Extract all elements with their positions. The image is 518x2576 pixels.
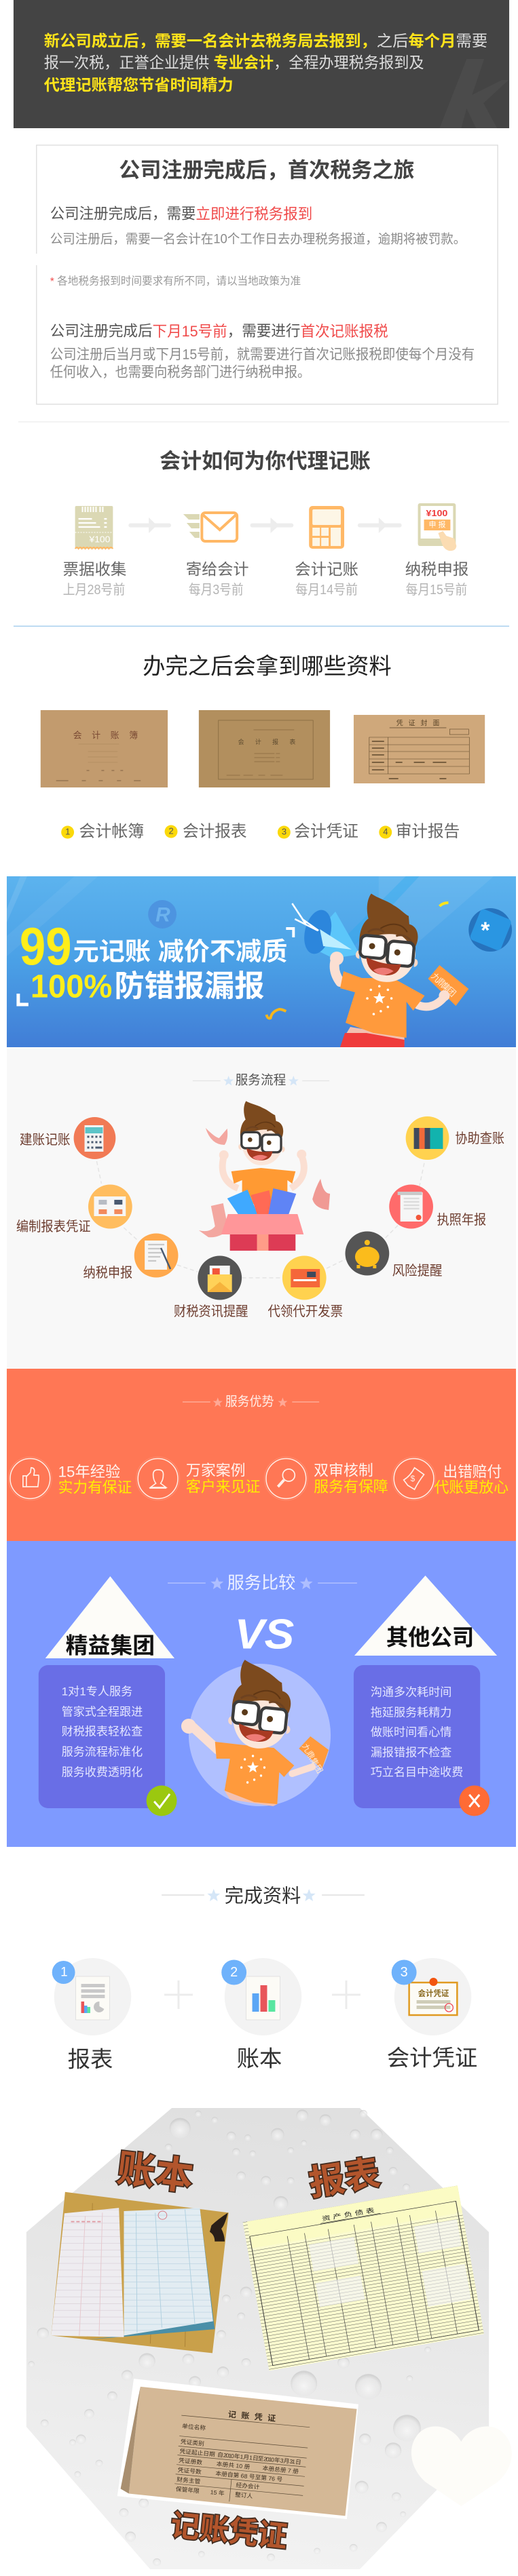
advantage: compensation <box>392 1457 508 1500</box>
service: setup bookkeeping <box>20 1117 115 1159</box>
badge 3: 3 <box>401 1965 408 1980</box>
headline: 100% error proof <box>31 969 264 1005</box>
panel: document photos on water-drop octagon <box>26 2108 512 2569</box>
advantage: double audit: 服务有保障 <box>314 1478 388 1496</box>
advantage: ten thousand cases <box>136 1457 261 1500</box>
icon: receipt: ¥100 <box>88 534 110 545</box>
illustration: megaphone mascot <box>292 893 468 1047</box>
advantage: compensation: 代账更放心 <box>434 1479 508 1496</box>
text: filing detail: 公司注册后当月或下月15号前，就需要进行首次记账报税即使每个月没有 <box>50 347 475 363</box>
panel: completed materials <box>52 1885 477 2072</box>
advantage: ten thousand cases: 万家案例 <box>186 1462 246 1479</box>
illustration: megaphone mascot: 九鼎集团 <box>429 971 458 999</box>
icon: tablet filing: ¥100 <box>426 509 447 518</box>
illustration: mascot in circle <box>181 1659 331 1806</box>
heading: comparison <box>168 1574 357 1593</box>
label 4: 审计报告 <box>396 822 460 841</box>
triangle: Jingyi Group <box>45 1576 174 1658</box>
item: accounting voucher: 会计凭证 <box>418 1988 449 1998</box>
text: first filing: 公司注册完成后下月15号前，需要进行首次记账报税 <box>50 322 388 340</box>
advantage: 15 years experience: 15年经验 <box>58 1463 120 1481</box>
step dates: 每月14号前 <box>295 582 358 598</box>
panel: how accountants do the books <box>63 449 468 598</box>
panel: service process <box>7 1048 516 1369</box>
photo: voucher envelope: 保管年限 <box>175 2485 200 2495</box>
photo: open ledger <box>51 2192 229 2353</box>
panel: service advantages <box>7 1369 516 1541</box>
headline: 99 yuan bookkeeping <box>20 918 287 976</box>
photo: account book cover: 会计账簿 <box>73 730 138 741</box>
service: audit assistance: 协助查账 <box>455 1131 504 1146</box>
list: other companies: 沟通多次耗时间 <box>371 1685 451 1699</box>
badge 1: 1 <box>60 1965 68 1980</box>
photo: voucher envelope: 本册总册 7 册 <box>262 2464 299 2475</box>
text: registration detail: 公司注册后，需要一名会计在10个工作日去办理税务报道，逾期将被罚款。 <box>50 231 466 247</box>
icon: R badge <box>148 900 177 929</box>
heading: advantages: 服务优势 <box>225 1394 274 1409</box>
label 2: 2 <box>169 825 174 836</box>
icon: calculator <box>309 506 344 549</box>
service: tax filing: 纳税申报 <box>84 1265 132 1281</box>
intro text: 代理记账帮您节省时间精力 <box>44 76 234 94</box>
triangle: other companies <box>354 1576 497 1656</box>
list: Jingyi Group: 管家式全程跟进 <box>62 1705 143 1719</box>
advantage: double audit: 双审核制 <box>314 1462 373 1479</box>
photo: voucher envelope: 凭证号数 <box>177 2466 202 2476</box>
step dates: 每月3号前 <box>189 582 244 598</box>
item: report <box>52 1958 131 2035</box>
service: tax filing <box>84 1233 178 1281</box>
service: license annual report: 执照年报 <box>437 1212 486 1228</box>
service: risk alert: 风险提醒 <box>392 1263 442 1279</box>
photo: voucher envelope: 整订人 <box>235 2491 253 2499</box>
heading: comparison: 服务比较 <box>227 1574 295 1593</box>
illustration: mascot with gift box <box>199 1101 330 1251</box>
photo: voucher cover <box>354 715 485 783</box>
service: audit assistance <box>406 1116 504 1160</box>
list: Jingyi Group <box>39 1665 165 1808</box>
photo: voucher envelope: 自 2010 年 1 月 1 日至 2010 年 3 月 31 日 <box>217 2451 301 2465</box>
note: * 各地税务报到时间要求有所不同，请以当地政策为准 <box>50 275 301 288</box>
photo: account book cover <box>41 710 168 787</box>
VS: VS <box>235 1611 294 1658</box>
icon: notebook badge <box>468 908 513 952</box>
advantage: 15 years experience <box>8 1457 132 1500</box>
label 1: 1 <box>65 826 70 837</box>
step labels: 会计记账 <box>295 560 358 578</box>
advantage: compensation: 出错赔付 <box>443 1463 502 1481</box>
heading: completed materials <box>162 1885 365 1907</box>
photo: voucher envelope: 15 年 <box>210 2488 225 2497</box>
heading: how accounting works: 会计如何为你代理记账 <box>160 449 371 473</box>
plus <box>164 1980 193 2009</box>
photo: voucher envelope: 单位名称 <box>182 2422 206 2432</box>
headline: 100% error proof: 防错报漏报 <box>114 969 264 1003</box>
water droplets <box>28 2109 431 2566</box>
list: Jingyi Group: 服务收费透明化 <box>62 1765 143 1779</box>
badge 2: 2 <box>230 1965 238 1980</box>
photo: voucher envelope <box>117 2379 358 2519</box>
plus <box>332 1980 360 2009</box>
item labels: 报表 <box>68 2046 113 2072</box>
icon: envelope <box>183 513 237 541</box>
arrow 3 <box>358 518 402 533</box>
overlay title: report: 报表 <box>306 2153 383 2203</box>
photo: voucher envelope: 凭证类别 <box>180 2438 204 2447</box>
list: other companies: 巧立名目中途收费 <box>371 1765 463 1779</box>
heading: completed materials: 完成资料 <box>225 1885 301 1907</box>
photo: voucher cover: 凭证封面 <box>396 718 439 728</box>
list: Jingyi Group: 财税报表轻松查 <box>62 1725 143 1738</box>
label 1: 会计帐簿 <box>79 822 144 841</box>
label 2: 会计报表 <box>183 822 247 841</box>
text: immediate registration: 公司注册完成后，需要立即进行税务报到 <box>50 205 312 222</box>
illustration: mascot in circle: 九鼎集团 <box>300 1742 325 1775</box>
headline: 99 yuan bookkeeping: 元记账 减价不减质 <box>73 937 287 966</box>
triangle: Jingyi Group: 精益集团 <box>66 1633 155 1658</box>
photo: report cover: 会计报表 <box>238 738 295 745</box>
arrow 2 <box>251 518 293 533</box>
icon: R badge: R <box>155 903 170 926</box>
service: setup bookkeeping: 建账记账 <box>20 1132 71 1148</box>
list: Jingyi Group: 服务流程标准化 <box>62 1745 143 1759</box>
intro text: 新公司成立后，需要一名会计去税务局去报到， 之后每个月需要 <box>44 32 487 50</box>
photo: voucher envelope: 财务主管 <box>177 2476 201 2485</box>
list: other companies <box>354 1665 480 1808</box>
heading: first tax journey: 公司注册完成后，首次税务之旅 <box>119 158 415 182</box>
list: other companies: 做账时间看心情 <box>371 1725 451 1739</box>
icon: notebook badge: * <box>481 918 490 943</box>
photo: voucher envelope: 本册共 10 册 <box>216 2460 251 2470</box>
arrow 1 <box>128 518 171 533</box>
item labels: 账本 <box>237 2046 282 2071</box>
headline: 99 yuan bookkeeping: 99 <box>20 918 72 976</box>
step labels: 纳税申报 <box>405 560 468 578</box>
advantage: ten thousand cases: 客户来见证 <box>186 1478 261 1496</box>
heading: service process: 服务流程 <box>236 1072 286 1088</box>
service: risk alert <box>346 1232 442 1279</box>
advantage: 15 years experience: 实力有保证 <box>58 1479 132 1496</box>
advantage: compensation: $ <box>411 1474 415 1483</box>
heading: advantages <box>183 1394 319 1409</box>
panel: dark intro banner <box>14 0 509 128</box>
brackets and confetti <box>18 903 448 1018</box>
label 3: 会计凭证 <box>294 822 358 841</box>
service: prepare reports and vouchers <box>16 1184 132 1234</box>
headline: 100% error proof: 100% <box>31 969 112 1005</box>
step labels <box>63 560 468 578</box>
panel: first tax journey <box>35 145 498 404</box>
panel: service comparison <box>7 1541 516 1847</box>
step labels: 票据收集 <box>63 560 126 578</box>
icon: tablet filing: 申报 <box>429 520 445 529</box>
icon: check <box>147 1785 177 1816</box>
panel: promo banner <box>7 876 516 1047</box>
panel: documents received <box>41 653 485 841</box>
service: invoice issuing <box>267 1256 343 1319</box>
item labels <box>68 2045 477 2072</box>
service: license annual report <box>389 1184 486 1229</box>
label 4: 4 <box>383 826 388 837</box>
icon: receipt <box>75 506 113 549</box>
heading: service process <box>193 1072 329 1088</box>
step dates <box>63 582 467 598</box>
label 3: 3 <box>282 826 286 837</box>
document labels <box>61 822 460 841</box>
intro text <box>44 32 487 94</box>
photo: balance sheet: 资 产 负 债 表 <box>321 2206 375 2223</box>
list: other companies: 拖延服务耗精力 <box>371 1706 451 1719</box>
text: filing detail <box>50 347 475 380</box>
overlay title: voucher: 记账凭证 <box>169 2509 289 2554</box>
advantage: double audit <box>264 1457 388 1500</box>
photo: voucher envelope: 本册自第 68 号至第 76 号 <box>215 2470 283 2483</box>
list: other companies: 漏报错报不检查 <box>371 1746 451 1759</box>
photo: voucher envelope: 经办会计 <box>236 2481 260 2491</box>
photo: report cover <box>199 710 330 787</box>
photo: voucher envelope: 凭证起止日期 <box>179 2447 215 2458</box>
step dates: 每月15号前 <box>406 582 467 598</box>
photo: voucher envelope: 凭证册数 <box>179 2456 203 2466</box>
item: accounting voucher <box>392 1958 471 2035</box>
item: ledger <box>221 1958 301 2035</box>
step dates: 上月28号前 <box>63 582 125 598</box>
list: Jingyi Group: 1对1专人服务 <box>62 1685 132 1698</box>
connectors <box>96 1161 425 1278</box>
overlay title: ledger: 账本 <box>115 2147 196 2198</box>
service: prepare reports and vouchers: 编制报表凭证 <box>16 1219 91 1234</box>
icon: cross <box>459 1785 489 1816</box>
triangle: other companies: 其他公司 <box>386 1624 474 1650</box>
service: tax information alerts: 财税资讯提醒 <box>174 1304 248 1319</box>
photo: balance sheet <box>243 2185 484 2370</box>
text: filing detail: 任何收入，也需要向税务部门进行纳税申报。 <box>50 364 310 380</box>
service: tax information alerts <box>174 1256 248 1319</box>
photo: voucher envelope: 记账凭证 <box>227 2409 276 2423</box>
icon: tablet filing <box>418 503 456 551</box>
service: invoice issuing: 代领代开发票 <box>267 1304 343 1319</box>
step labels: 寄给会计 <box>186 560 249 578</box>
icon: heart <box>411 2426 512 2506</box>
heading: documents: 办完之后会拿到哪些资料 <box>143 653 392 679</box>
item labels: 会计凭证 <box>387 2045 477 2071</box>
intro text: 报一次税，正誉企业提供 专业会计，全程办理税务报到及 <box>44 54 424 71</box>
